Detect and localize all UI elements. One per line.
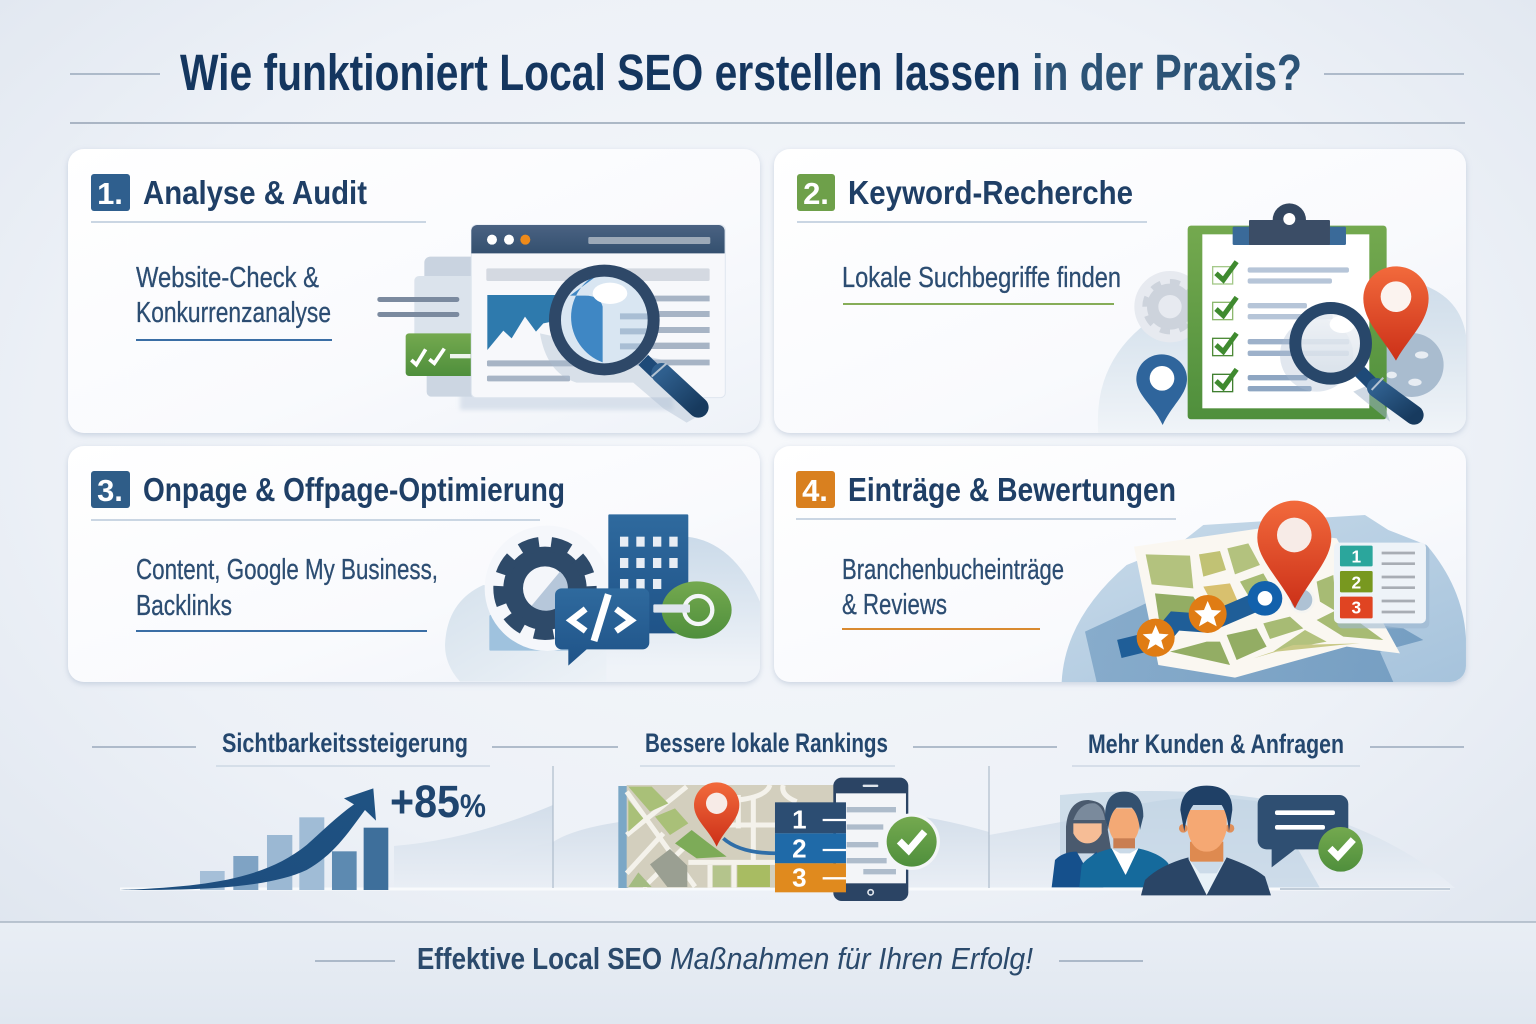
- arrow: [120, 788, 376, 890]
- ranks: 1: [792, 804, 807, 834]
- text: Website-Check: Konkurrenzanalyse: [136, 297, 331, 329]
- panel: Onpage & Offpage-Optimierung: [68, 446, 760, 682]
- phone: [833, 778, 908, 901]
- badge 2: [797, 174, 835, 211]
- badge 4: 4.: [802, 473, 828, 508]
- panel: Analyse & Audit: [68, 149, 760, 433]
- badge 1: [91, 174, 130, 211]
- red pin: [1363, 266, 1429, 361]
- heading: Keyword-Recherche: Keyword-Recherche: [848, 174, 1133, 211]
- ranks: 2: [792, 833, 807, 863]
- icon: clipboard with pins: [1098, 203, 1466, 433]
- ranks: [775, 802, 846, 893]
- heading: Sichtbarkeitssteigerung: Sichtbarkeitssteigerung: [222, 728, 468, 758]
- route: [1119, 599, 1263, 649]
- badge 2: 2.: [803, 176, 829, 211]
- text: Website-Check: Website-Check &: [136, 262, 319, 294]
- panel: Einträge & Bewertungen: [774, 446, 1466, 682]
- man 1: [1141, 786, 1271, 895]
- heading: Analyse & Audit: Analyse & Audit: [143, 174, 367, 211]
- text: Branchenbuch: [842, 554, 1064, 629]
- big pin: [1257, 501, 1331, 608]
- badge 3: 3.: [97, 473, 123, 508]
- icon: people and message: [1052, 786, 1363, 895]
- title: Wie funktioniert Local SEO erstellen lassen in der Praxis?: [180, 44, 1302, 101]
- text: Branchenbuch: & Reviews: [842, 589, 947, 621]
- check badge: [883, 813, 940, 870]
- rank card: 1: [1351, 546, 1361, 566]
- text: Content: Backlinks: [136, 590, 232, 622]
- badge 1: 1.: [97, 176, 123, 211]
- bottom section backdrop hills: [120, 791, 1455, 893]
- icon: gear, building, code, link: [445, 514, 760, 682]
- heading: Onpage: Onpage & Offpage-Optimierung: [143, 471, 565, 508]
- rank card: 2: [1351, 572, 1361, 592]
- blue pin: [1136, 354, 1187, 425]
- woman: [1052, 800, 1112, 887]
- text: Website-Check: [136, 262, 332, 340]
- footer text: Maßnahmen für Ihren Erfolg!: [670, 941, 1033, 976]
- footer text: Effektive Local SEO: [417, 941, 662, 976]
- rank card: 3: [1351, 598, 1361, 618]
- man 2: [1079, 792, 1170, 887]
- footer band: [0, 922, 1536, 1024]
- text: Content: [136, 554, 438, 631]
- icon: map with pin and ranks: [1062, 501, 1466, 682]
- chart: growth bars with arrow: [120, 776, 486, 890]
- icon: browser with magnifier: [377, 225, 725, 423]
- text: Branchenbuch: Branchenbucheinträge: [842, 554, 1064, 586]
- panel: Keyword-Recherche: [774, 149, 1466, 433]
- ranks: 3: [792, 863, 807, 893]
- value: +85%: +85%: [390, 776, 486, 827]
- heading: Einträge: Einträge & Bewertungen: [848, 471, 1176, 508]
- rank card: [1334, 543, 1429, 628]
- badge 3: [91, 471, 130, 508]
- text: Lokale Suchbegriffe: Lokale Suchbegriffe finden: [842, 262, 1121, 294]
- text: Content: Content, Google My Business,: [136, 554, 438, 586]
- pin: [694, 782, 739, 847]
- badge 4: [796, 471, 835, 508]
- footer text: [315, 941, 1143, 976]
- heading: Bessere lokale Rankings: Bessere lokale Rankings: [645, 728, 888, 758]
- icon: map, ranking list and phone: [618, 778, 940, 901]
- message: [1258, 795, 1363, 872]
- heading: Mehr Kunden & Anfragen: Mehr Kunden & Anfragen: [1088, 729, 1344, 759]
